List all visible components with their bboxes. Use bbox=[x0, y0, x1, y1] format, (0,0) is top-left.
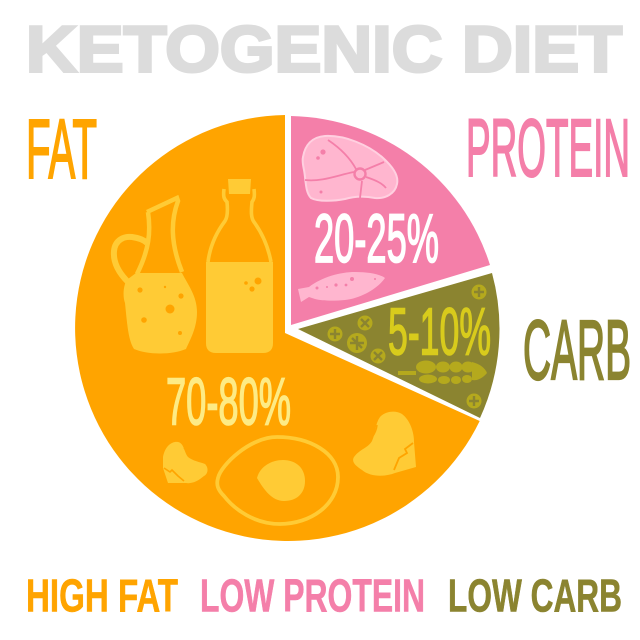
title: KETOGENIC DIET bbox=[26, 12, 622, 86]
pie chart bbox=[75, 115, 499, 541]
icon: jug bbox=[114, 198, 197, 354]
icon: left nut bbox=[163, 442, 208, 483]
percent: carb: 5-10% bbox=[388, 294, 491, 370]
icon: oil bottle bbox=[206, 179, 273, 353]
icon: seeds bbox=[328, 284, 486, 408]
text: FAT bbox=[26, 102, 97, 196]
icon: right nut bbox=[353, 412, 416, 476]
panel: fat slice bbox=[75, 115, 480, 541]
percent: fat: 70-80% bbox=[166, 364, 291, 440]
icon: fish bbox=[298, 272, 385, 302]
panel: carb slice bbox=[298, 273, 499, 418]
icon: wheat ear bbox=[398, 360, 487, 384]
caption: low protein: LOW PROTEIN bbox=[200, 570, 425, 622]
panel: protein slice bbox=[291, 116, 490, 325]
icon: steak bbox=[303, 136, 397, 201]
caption: high fat: HIGH FAT bbox=[26, 570, 178, 622]
icon: fried egg bbox=[217, 437, 338, 524]
percent: protein: 20-25% bbox=[314, 200, 439, 277]
